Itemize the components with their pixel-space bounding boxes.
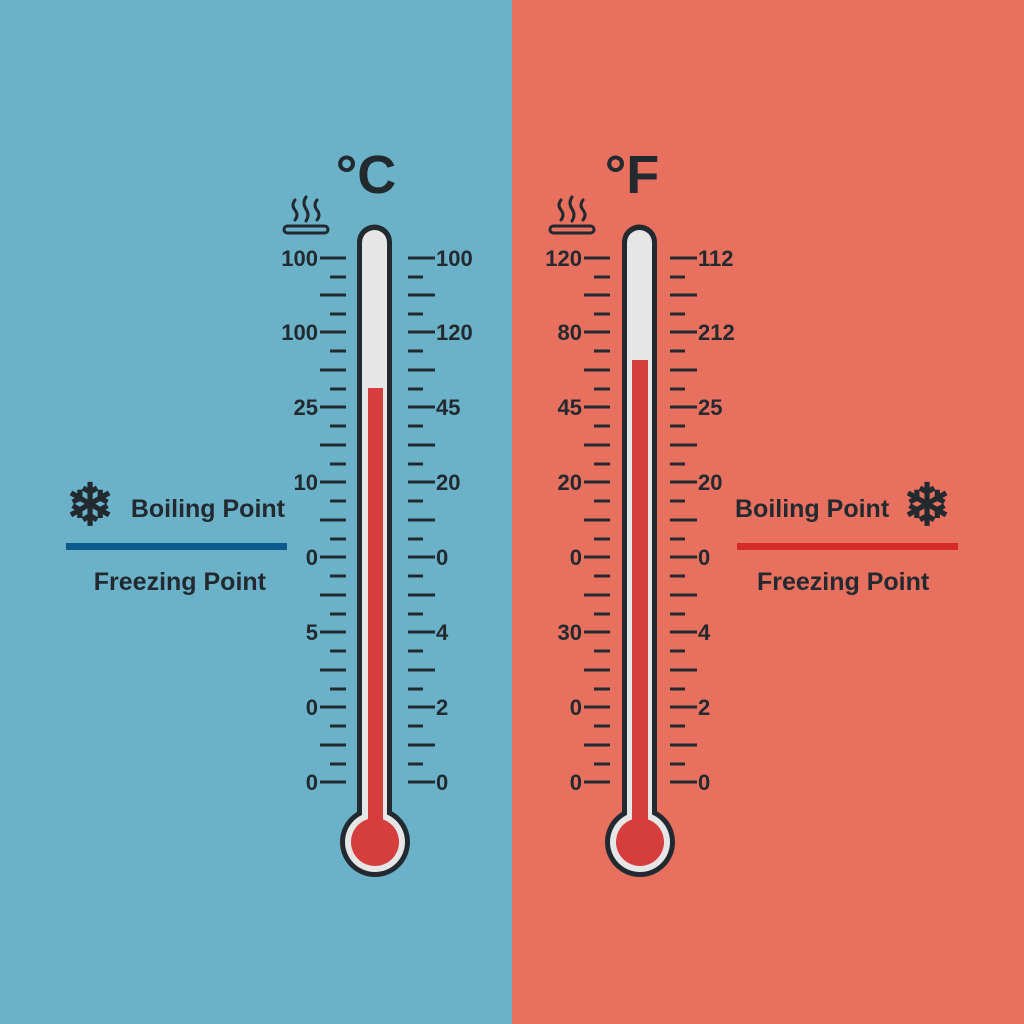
thermometer: fahrenheit: [605, 224, 675, 877]
scale labels: celsius right: [436, 246, 473, 795]
scale labels: celsius left: [281, 246, 318, 795]
scale labels: fahrenheit left: 120: [545, 246, 582, 271]
scale labels: celsius left: 100: [281, 246, 318, 271]
icon: snowflake left: ❄: [66, 473, 114, 538]
title: celsius: °C: [336, 145, 396, 205]
scale labels: celsius right: 45: [436, 395, 460, 420]
scale labels: celsius right: 100: [436, 246, 473, 271]
scale labels: celsius left: 10: [294, 470, 318, 495]
scale labels: fahrenheit left: 45: [558, 395, 582, 420]
scale labels: celsius left: 5: [306, 620, 318, 645]
scale labels: fahrenheit left: 0: [570, 545, 582, 570]
scale labels: fahrenheit right: 25: [698, 395, 722, 420]
scale labels: celsius right: 2: [436, 695, 448, 720]
callout: celsius reference points: Freezing Point: [94, 568, 267, 596]
scale labels: fahrenheit right: 0: [698, 545, 710, 570]
thermometer: celsius: [340, 224, 410, 877]
scale labels: celsius right: 120: [436, 320, 473, 345]
scale labels: celsius left: 25: [294, 395, 318, 420]
scale labels: fahrenheit right: 20: [698, 470, 722, 495]
scale labels: celsius right: 4: [436, 620, 449, 645]
icon: steam left: [284, 197, 328, 233]
scale labels: fahrenheit right: 112: [698, 246, 734, 271]
scale labels: celsius left: 0: [306, 695, 318, 720]
scale labels: celsius left: 0: [306, 545, 318, 570]
scale labels: fahrenheit left: 0: [570, 770, 582, 795]
scale labels: celsius right: 20: [436, 470, 460, 495]
icon: steam right: [550, 197, 594, 233]
callout: fahrenheit reference points: Boiling Point: [735, 495, 890, 523]
scale labels: fahrenheit right: [698, 246, 735, 795]
callout: fahrenheit reference points: Freezing Point: [757, 568, 930, 596]
scale labels: fahrenheit right: 4: [698, 620, 711, 645]
icon: snowflake right: ❄: [903, 473, 951, 538]
scale labels: celsius right: 0: [436, 545, 448, 570]
scale labels: fahrenheit left: 0: [570, 695, 582, 720]
scale ticks: fahrenheit: [584, 258, 697, 782]
scale labels: fahrenheit left: 20: [558, 470, 582, 495]
scale labels: fahrenheit left: 80: [558, 320, 582, 345]
scale labels: fahrenheit left: [545, 246, 582, 795]
title: fahrenheit: °F: [605, 145, 659, 205]
panel: fahrenheit background: [512, 0, 1024, 1024]
callout: celsius reference points: Boiling Point: [131, 495, 286, 523]
scale labels: celsius left: 100: [281, 320, 318, 345]
scale labels: fahrenheit right: 212: [698, 320, 735, 345]
panel: celsius background: [0, 0, 512, 1024]
scale labels: celsius right: 0: [436, 770, 448, 795]
scale labels: fahrenheit left: 30: [558, 620, 582, 645]
scale labels: fahrenheit right: 2: [698, 695, 710, 720]
scale labels: fahrenheit right: 0: [698, 770, 710, 795]
scale labels: celsius left: 0: [306, 770, 318, 795]
scale ticks: celsius: [320, 258, 435, 782]
callout: celsius reference points: [66, 473, 287, 596]
callout: fahrenheit reference points: [735, 473, 958, 596]
